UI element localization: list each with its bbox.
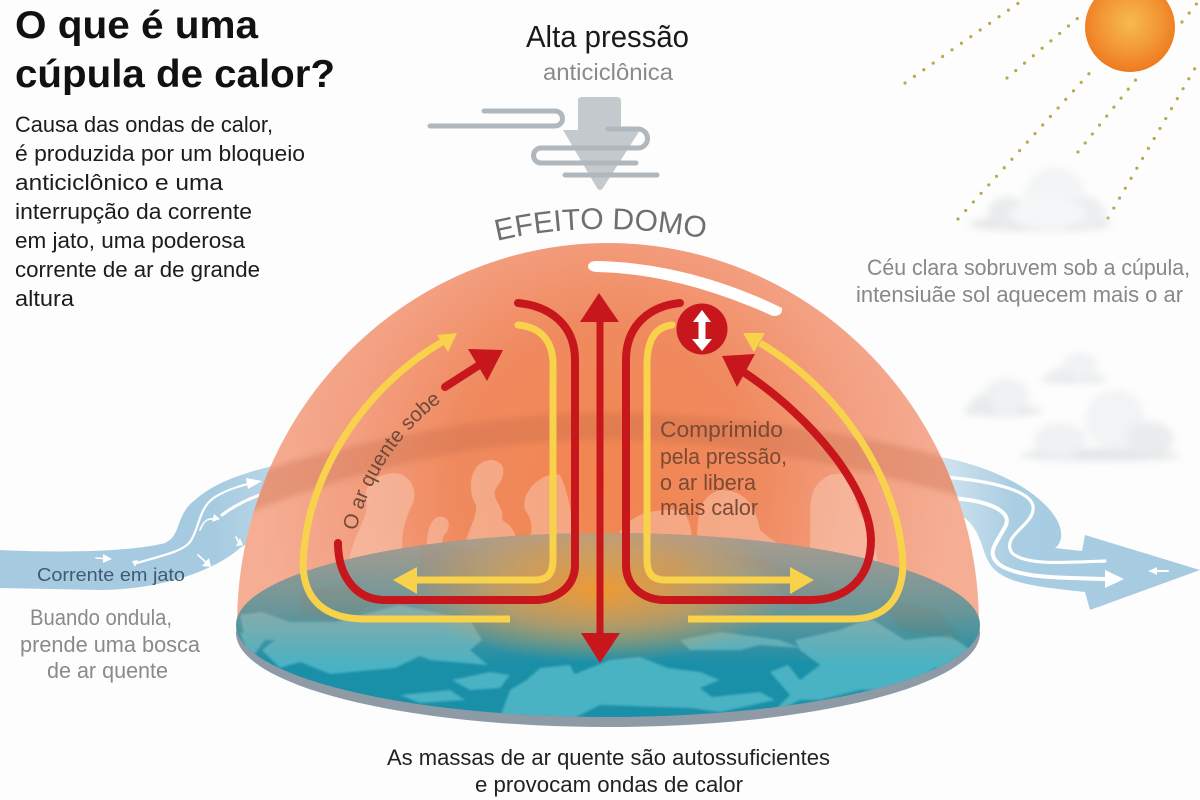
intro text block: é produzida por um bloqueio — [15, 141, 305, 166]
intro text block: Causa das ondas de calor, — [15, 112, 273, 137]
panel: heat dome — [230, 243, 990, 727]
sun rays — [905, 2, 1198, 219]
high pressure heading: Alta pressão — [526, 19, 689, 54]
intro text block: anticiclônico e uma — [15, 170, 224, 195]
yellow circulation right outer — [688, 333, 903, 619]
cloud: large right — [1020, 390, 1180, 461]
compression text — [660, 417, 787, 520]
warm overlay on disc — [236, 533, 980, 660]
icon: pressure circle — [676, 304, 728, 354]
jet stream caption — [20, 605, 201, 683]
earth land masses — [236, 533, 980, 716]
earth disc — [236, 533, 980, 717]
sky caption: intensiuãe sol aquecem mais o ar — [856, 282, 1183, 307]
title — [15, 4, 335, 96]
bottom caption: As massas de ar quente são autossuficientes — [387, 745, 830, 770]
glass highlight — [588, 261, 782, 316]
bottom caption: e provocam ondas de calor — [475, 772, 743, 797]
icon: high pressure down arrow with wind lines — [430, 97, 657, 190]
sky caption: Céu clara sobruvem sob a cúpula, — [867, 255, 1190, 280]
icon: sun — [1085, 0, 1175, 72]
compression text: pela pressão, — [660, 444, 787, 469]
cloud under the rays — [968, 167, 1112, 231]
yellow circulation right inner — [647, 325, 814, 594]
jet stream caption: de ar quente — [47, 658, 168, 683]
title: cúpula de calor? — [15, 53, 335, 96]
red circulation left — [338, 303, 575, 600]
title: O que é uma — [15, 4, 258, 47]
intro text block — [15, 112, 305, 311]
central vertical double arrow — [580, 293, 620, 663]
bottom caption — [387, 745, 830, 797]
label: jet stream: Corrente em jato — [37, 564, 185, 585]
compression text: o ar libera — [660, 470, 757, 495]
intro text block: corrente de ar de grande — [15, 257, 260, 282]
sky caption — [856, 255, 1190, 307]
compression text: mais calor — [660, 495, 758, 520]
label: O ar quente sobe: O ar quente sobe — [344, 394, 440, 528]
darker atmospheric band — [254, 413, 958, 512]
high pressure heading: anticiclônica — [543, 59, 673, 85]
high pressure heading — [526, 19, 689, 85]
jet stream caption: prende uma bosca — [20, 632, 201, 657]
jet stream left band — [0, 463, 285, 590]
jet stream right arrow — [935, 456, 1200, 610]
heat plumes — [349, 460, 878, 562]
red circulation right with arrow — [626, 303, 871, 600]
yellow circulation left outer — [303, 333, 510, 619]
cloud: small top — [1041, 352, 1107, 383]
earth disc edge — [236, 539, 980, 727]
dome shell — [237, 243, 979, 625]
jet stream caption: Buando ondula, — [30, 605, 172, 630]
yellow circulation left inner — [393, 325, 553, 594]
red arrow: hot air rising short — [445, 349, 503, 387]
label: efeito domo: EFEITO DOMO — [494, 208, 706, 240]
cloud: small left — [962, 378, 1042, 416]
compression text: Comprimido — [660, 417, 783, 442]
intro text block: interrupção da corrente — [15, 199, 252, 224]
intro text block: altura — [15, 286, 75, 311]
intro text block: em jato, uma poderosa — [15, 228, 246, 253]
